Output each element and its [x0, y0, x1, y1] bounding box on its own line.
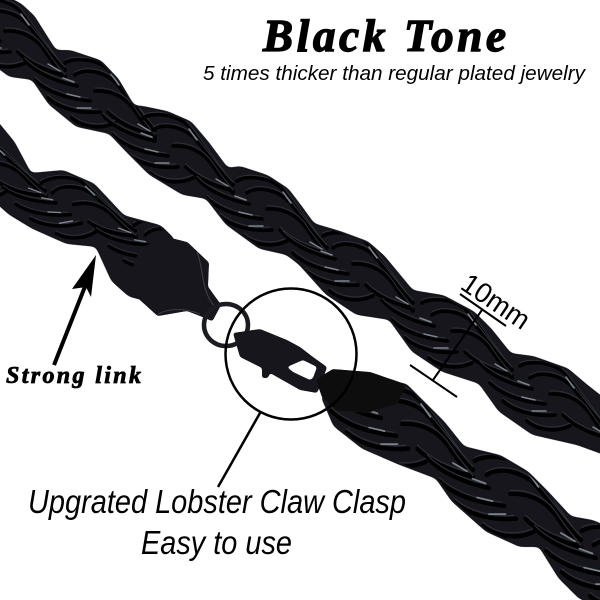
- clasp end cap, left: [127, 237, 220, 320]
- upper rope chain: [0, 0, 600, 455]
- dimension label: 10mm: [456, 267, 536, 335]
- dimension marker: 10mm: [410, 267, 536, 397]
- clasp end cap, right: [317, 370, 405, 412]
- label: strong link: Strong link: [6, 363, 141, 389]
- jump ring: [204, 304, 248, 346]
- callout pointer line: [218, 413, 260, 487]
- lower rope chain, right section: [320, 384, 600, 600]
- clasp caption: [28, 483, 406, 561]
- title: Black Tone: [262, 11, 506, 61]
- lobster claw clasp: [233, 329, 327, 393]
- subtitle: 5 times thicker than regular plated jewelry: [203, 63, 586, 85]
- clasp caption: Easy to use: [141, 524, 292, 561]
- clasp caption: Upgrated Lobster Claw Clasp: [28, 483, 406, 520]
- lower rope chain, left section: [0, 124, 174, 300]
- arrow: strong link: [54, 255, 96, 365]
- callout circle around clasp: [226, 288, 356, 420]
